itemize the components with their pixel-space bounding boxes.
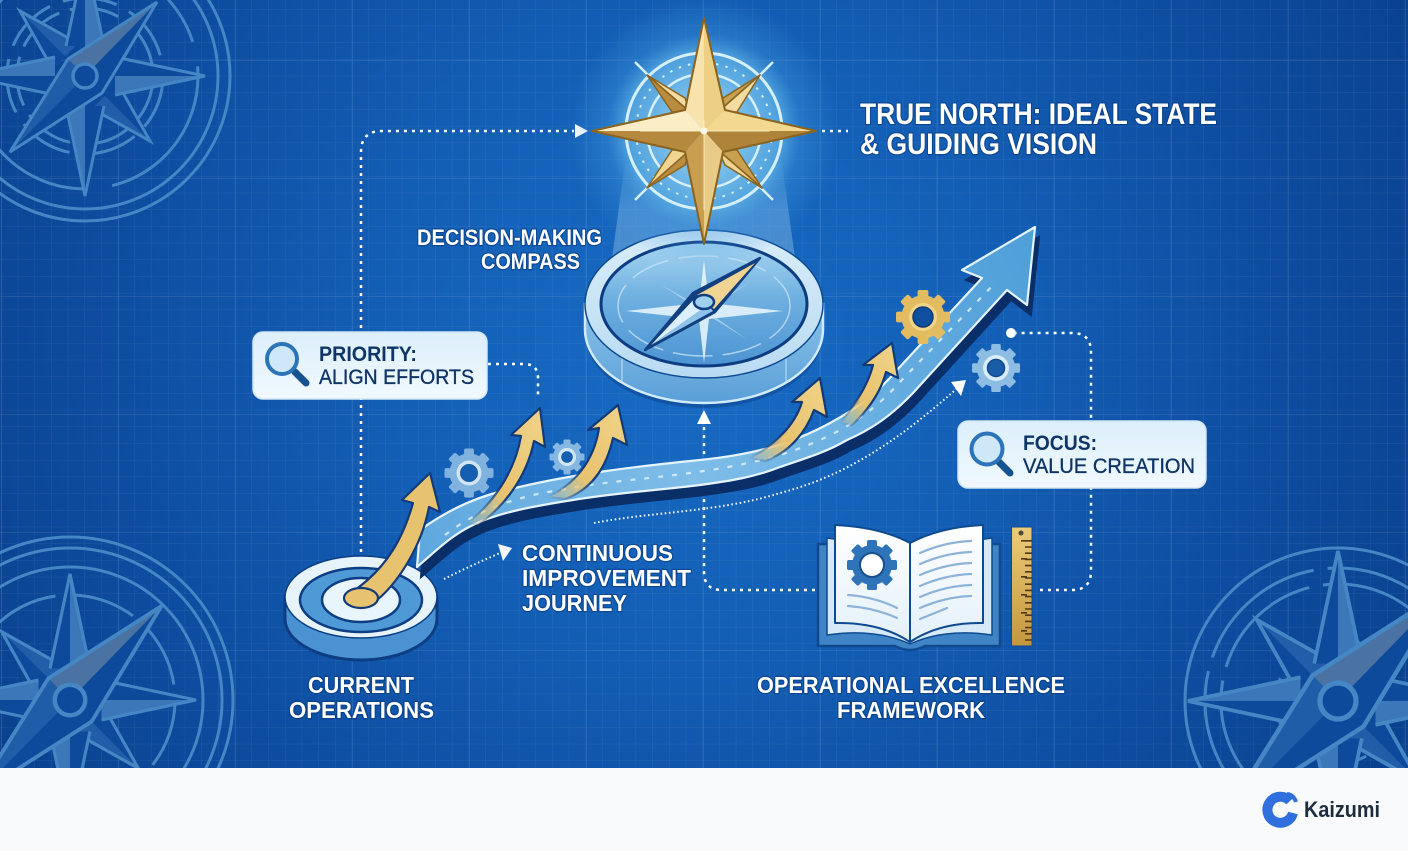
callout: priority <box>253 332 487 399</box>
current operations label: CURRENT <box>308 672 414 698</box>
true north heading: TRUE NORTH: IDEAL STATE <box>860 98 1217 131</box>
decision-making compass label <box>417 225 602 274</box>
book gear <box>847 540 897 590</box>
decorative compass: bottom right <box>1185 548 1408 851</box>
callout text: PRIORITY: <box>319 343 417 366</box>
callout: focus <box>958 421 1206 488</box>
icon: magnifier <box>972 434 1010 473</box>
continuous improvement label: JOURNEY <box>522 590 627 616</box>
continuous improvement label: CONTINUOUS <box>522 540 673 566</box>
improvement arrow 5 <box>840 343 898 425</box>
operational excellence framework label <box>757 672 1065 723</box>
dotted line: current operations to true north <box>361 124 588 552</box>
current operations target <box>285 556 437 660</box>
cardinal points <box>592 18 816 244</box>
continuous improvement label <box>522 540 691 616</box>
decision-making compass <box>585 230 823 408</box>
logo wordmark: Kaizumi <box>1304 797 1380 822</box>
callout text: FOCUS: <box>1023 432 1097 455</box>
callout text <box>1023 432 1195 478</box>
icon: gold gear <box>896 290 950 344</box>
decorative compass: bottom left <box>0 537 233 851</box>
improvement arrow 1 <box>352 473 440 604</box>
icon: blue gear left <box>444 448 494 498</box>
guide rings <box>626 53 782 209</box>
icon: magnifier <box>267 344 306 383</box>
callout text: VALUE CREATION <box>1023 455 1195 478</box>
logo: Kaizumi <box>1267 794 1380 823</box>
decision-making compass label: DECISION-MAKING <box>417 225 602 250</box>
current operations label <box>289 672 434 723</box>
light beam from star to compass <box>612 163 795 258</box>
dotted line: framework to focus and journey <box>1006 328 1091 590</box>
compass star <box>626 260 783 363</box>
diagonal points <box>647 75 762 188</box>
callout text: ALIGN EFFORTS <box>319 366 474 389</box>
footer band <box>0 768 1408 851</box>
operational excellence framework label: OPERATIONAL EXCELLENCE <box>757 672 1065 698</box>
true north heading: & GUIDING VISION <box>860 128 1097 161</box>
dotted line: priority callout to journey <box>488 364 538 398</box>
logo mark <box>1267 794 1296 823</box>
true north star <box>569 0 839 266</box>
small dotted arrow to continuous improvement label <box>444 544 512 579</box>
decision-making compass label: COMPASS <box>481 249 580 274</box>
icon: open book <box>818 525 1000 650</box>
target centre blob <box>344 588 378 608</box>
icon: ruler <box>1012 527 1032 646</box>
operational excellence framework label: FRAMEWORK <box>837 697 985 723</box>
current operations label: OPERATIONS <box>289 697 434 723</box>
true north heading <box>860 98 1217 161</box>
decorative compass: top left <box>0 0 230 221</box>
continuous improvement road with arrow <box>417 227 1039 577</box>
icon: pale gear right <box>972 344 1020 392</box>
improvement arrow 3 <box>547 405 627 499</box>
book text lines <box>848 541 971 619</box>
long dotted arrow below road <box>594 380 966 523</box>
improvement arrow 2 <box>467 408 545 525</box>
icon: blue gear small <box>550 440 584 474</box>
compass needle <box>645 258 760 350</box>
star glow <box>569 0 839 266</box>
dotted line: true north to title <box>822 130 848 132</box>
improvement arrow 4 <box>750 378 827 461</box>
dotted line: framework up to compass <box>697 410 815 590</box>
continuous improvement label: IMPROVEMENT <box>522 565 691 591</box>
callout text <box>319 343 474 389</box>
